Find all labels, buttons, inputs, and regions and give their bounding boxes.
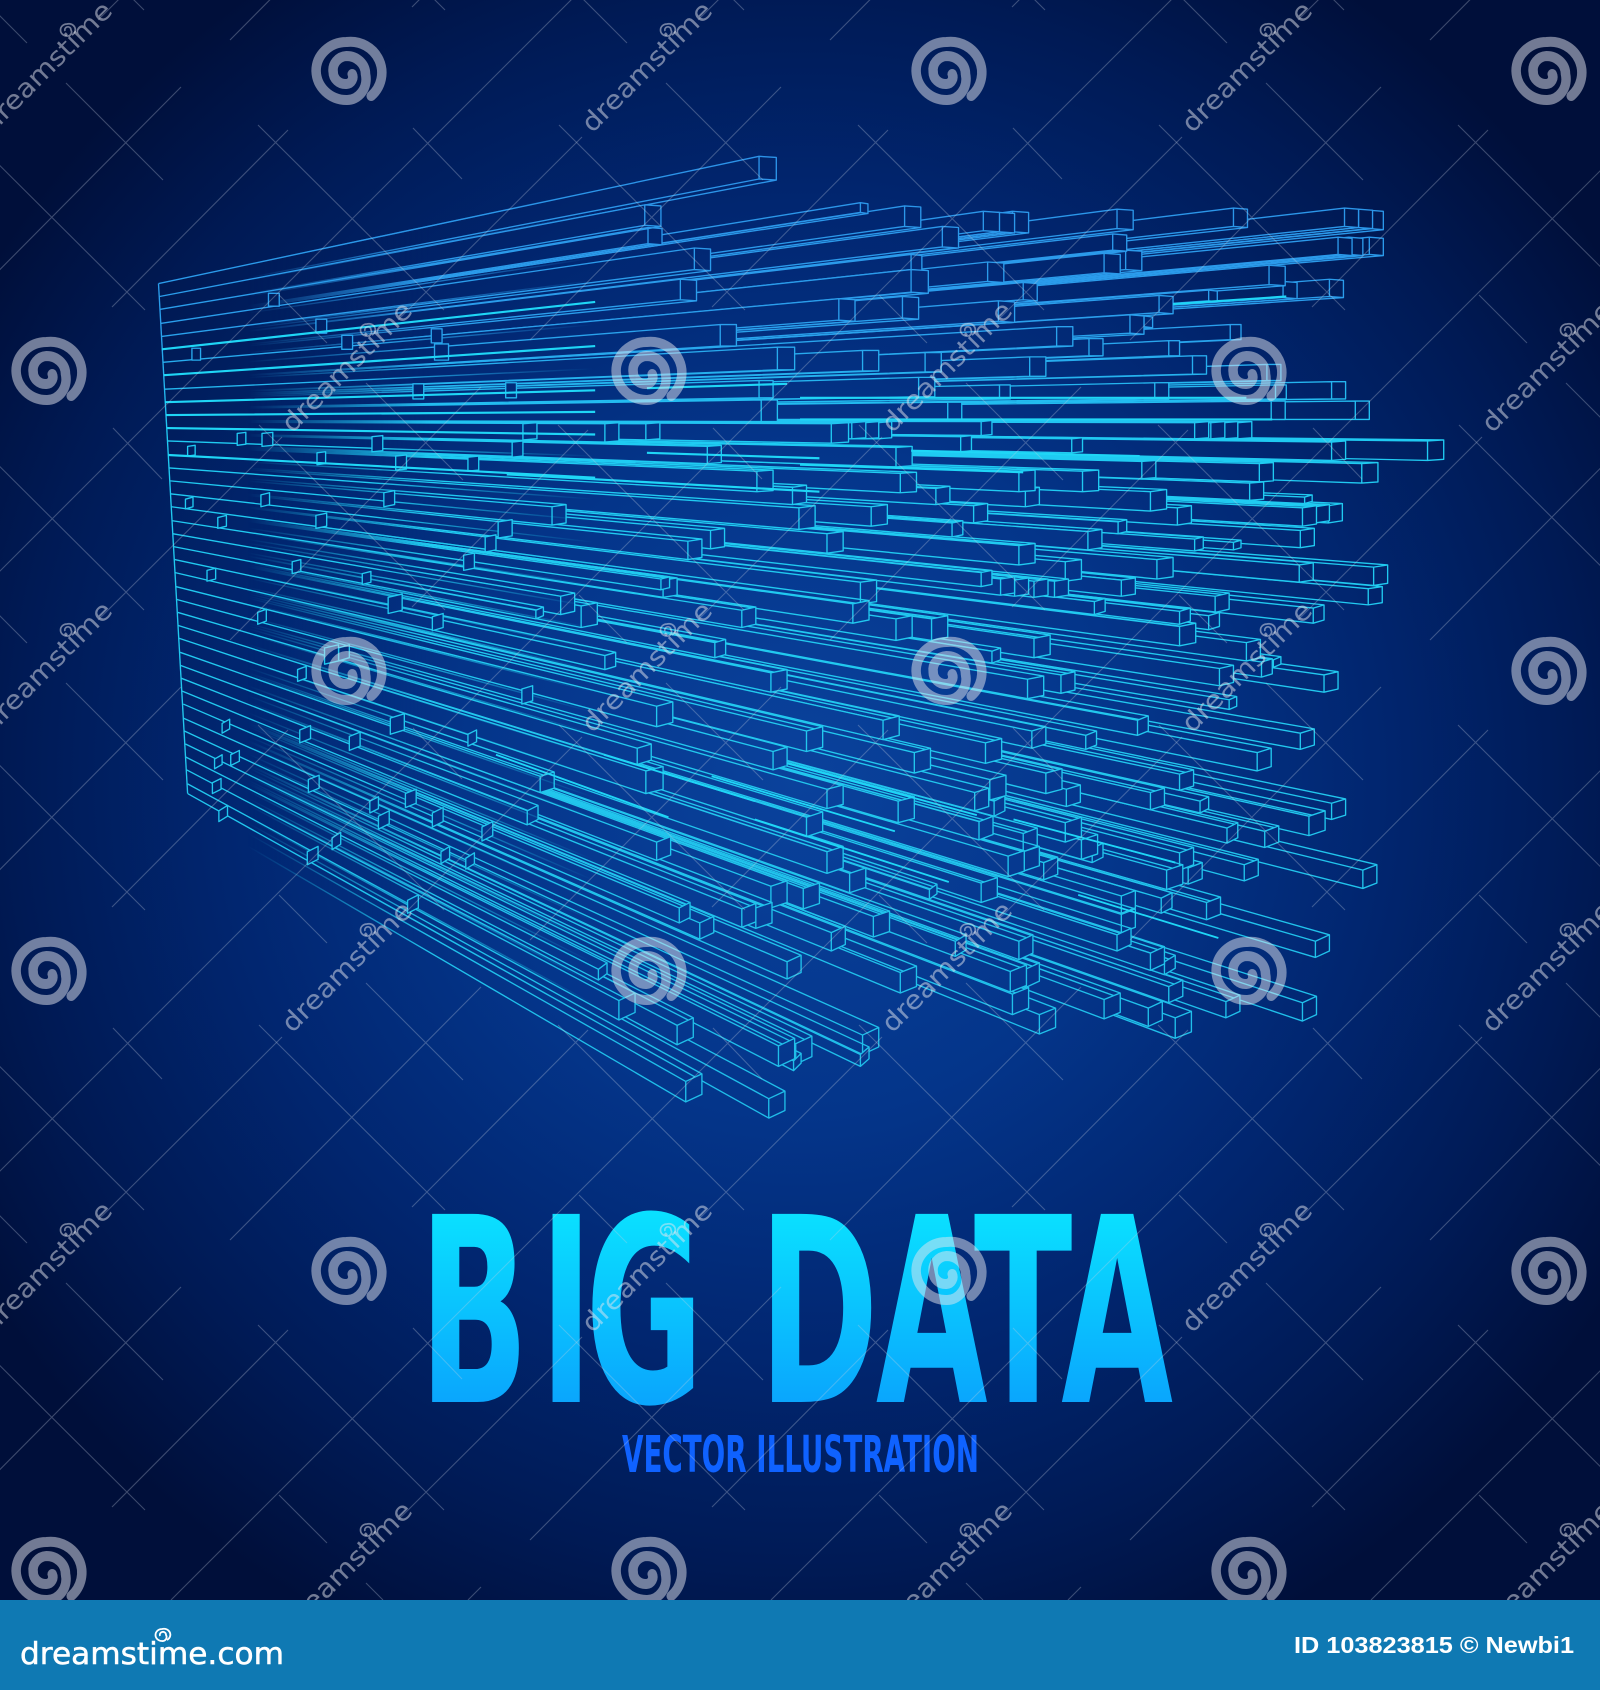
footer logo text: dreamstime.com: dreamstime.com (20, 1637, 284, 1672)
footer image id and credit: ID 103823815 © Newbi1 (1294, 1632, 1574, 1658)
watermark: dreamstime diagonal text: dreamstime (876, 1496, 1019, 1639)
bright highlight streaks (162, 297, 1286, 938)
watermark: dreamstime diagonal text: dreamstime (1176, 1196, 1319, 1339)
watermark: dreamstime diagonal text: dreamstime (576, 1196, 719, 1339)
watermark: dreamstime diagonal text: dreamstime (576, 596, 719, 739)
title: BIG DATA: BIG DATA (419, 1164, 1173, 1464)
chart: wireframe bars in perspective (158, 156, 1444, 1119)
subtitle: VECTOR ILLUSTRATION: VECTOR ILLUSTRATION (622, 1426, 979, 1485)
wall edge of the block (158, 284, 188, 794)
watermark: dreamstime diagonal text: dreamstime (876, 296, 1019, 439)
watermark: dreamstime diagonal text: dreamstime (1176, 596, 1319, 739)
watermark: dreamstime diagonal text: dreamstime (276, 296, 419, 439)
watermark: dreamstime diagonal text: dreamstime (276, 896, 419, 1039)
watermark: dreamstime diagonal text: dreamstime (1176, 0, 1319, 139)
footer banner (0, 1600, 1600, 1690)
footer logo spiral (156, 1629, 170, 1641)
watermark: dreamstime diagonal text: dreamstime (276, 1496, 419, 1639)
watermark: dreamstime diagonal text: dreamstime (576, 0, 719, 139)
watermark: dreamstime diagonal text: dreamstime (876, 896, 1019, 1039)
